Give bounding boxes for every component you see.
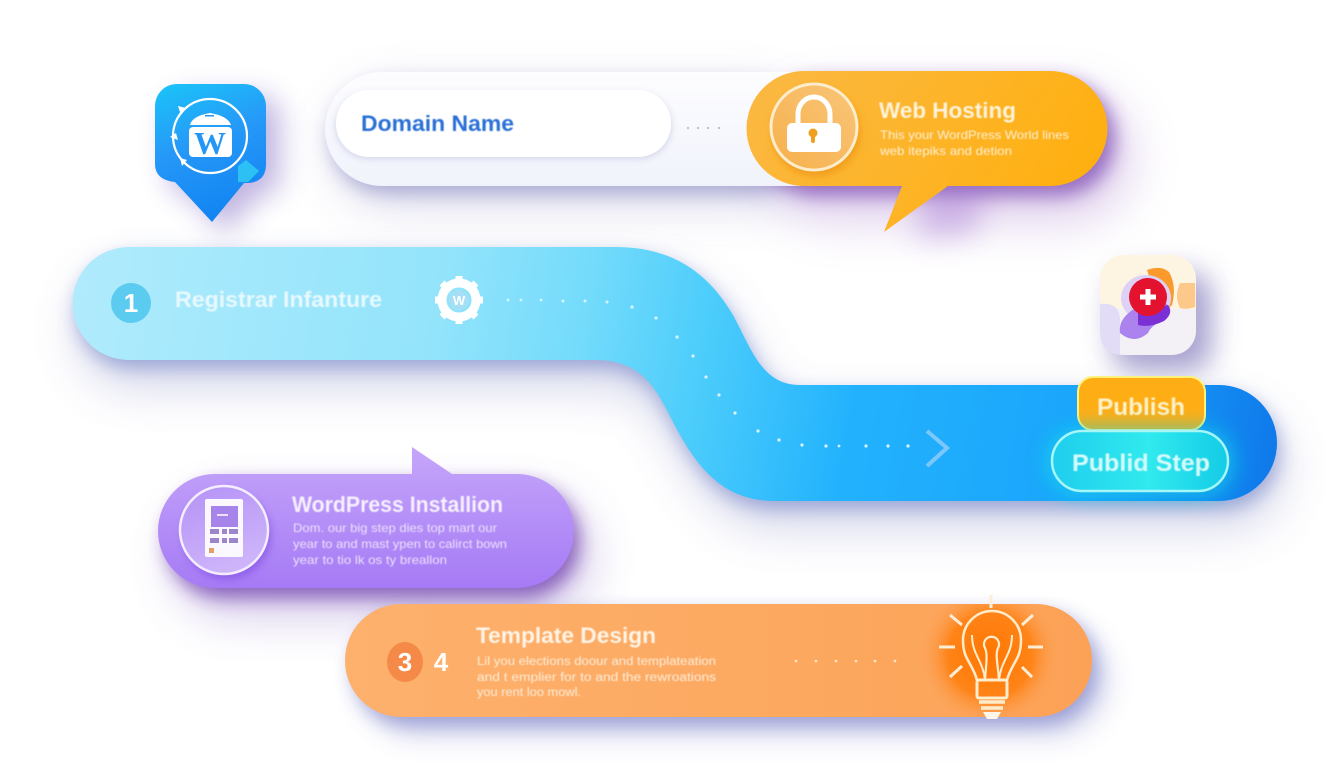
step number 1: 1 [124,288,138,318]
description: template design: you rent loo mowl. [477,687,581,699]
heading: web hosting: Web Hosting [879,98,1016,123]
button: publid step [1044,426,1236,498]
description: web hosting: This your WordPress World lines [880,128,1069,142]
panel: web hosting callout [747,71,1107,232]
description: template design: and t emplier for to and the rewroations [477,672,716,684]
icon: app badge with plus [1100,255,1196,355]
panel: registrar flow ribbon [72,247,1277,501]
dotted connector [687,127,720,129]
step numbers 3 and 4: 4 [434,647,449,677]
description: wordpress installation: year to and mast ypen to calirct bown [293,537,507,551]
icon: padlock [771,84,860,176]
panel: wordpress installation callout [158,447,574,588]
button: publid step: Publid Step [1072,450,1210,477]
icon: gear [435,276,483,324]
description: template design: Lil you elections doour and templateation [477,656,716,668]
icon: wordpress location pin [155,84,266,222]
input pill: domain name: Domain Name [361,111,514,136]
description: template design [477,656,716,699]
step number 1 [111,283,151,323]
icon: wordpress location pin: W [194,125,226,161]
arrow: chevron [927,431,947,466]
panel: template design [345,595,1092,719]
step numbers 3 and 4 [387,642,449,682]
dotted connector [795,660,896,662]
input pill: domain name [336,90,671,158]
heading: template design: Template Design [476,623,656,648]
button: publish [1078,377,1205,430]
dotted route [507,299,910,448]
step numbers 3 and 4: 3 [398,647,412,677]
description: wordpress installation: year to tio lk os ty breallon [293,553,447,567]
heading: wordpress installation: WordPress Installion [292,492,503,517]
description: web hosting: web itepiks and detion [879,144,1012,158]
icon: document in circle [180,486,271,579]
icon: gear: W [453,293,466,308]
panel: domain name track [325,72,800,186]
icon: light bulb [929,595,1050,719]
soft shadows [75,80,1283,735]
description: web hosting [879,128,1069,158]
description: wordpress installation: Dom. our big step dies top mart our [293,521,497,535]
description: wordpress installation [293,521,507,567]
label: registrar: Registrar Infanture [175,287,382,312]
button: publish: Publish [1097,394,1185,421]
